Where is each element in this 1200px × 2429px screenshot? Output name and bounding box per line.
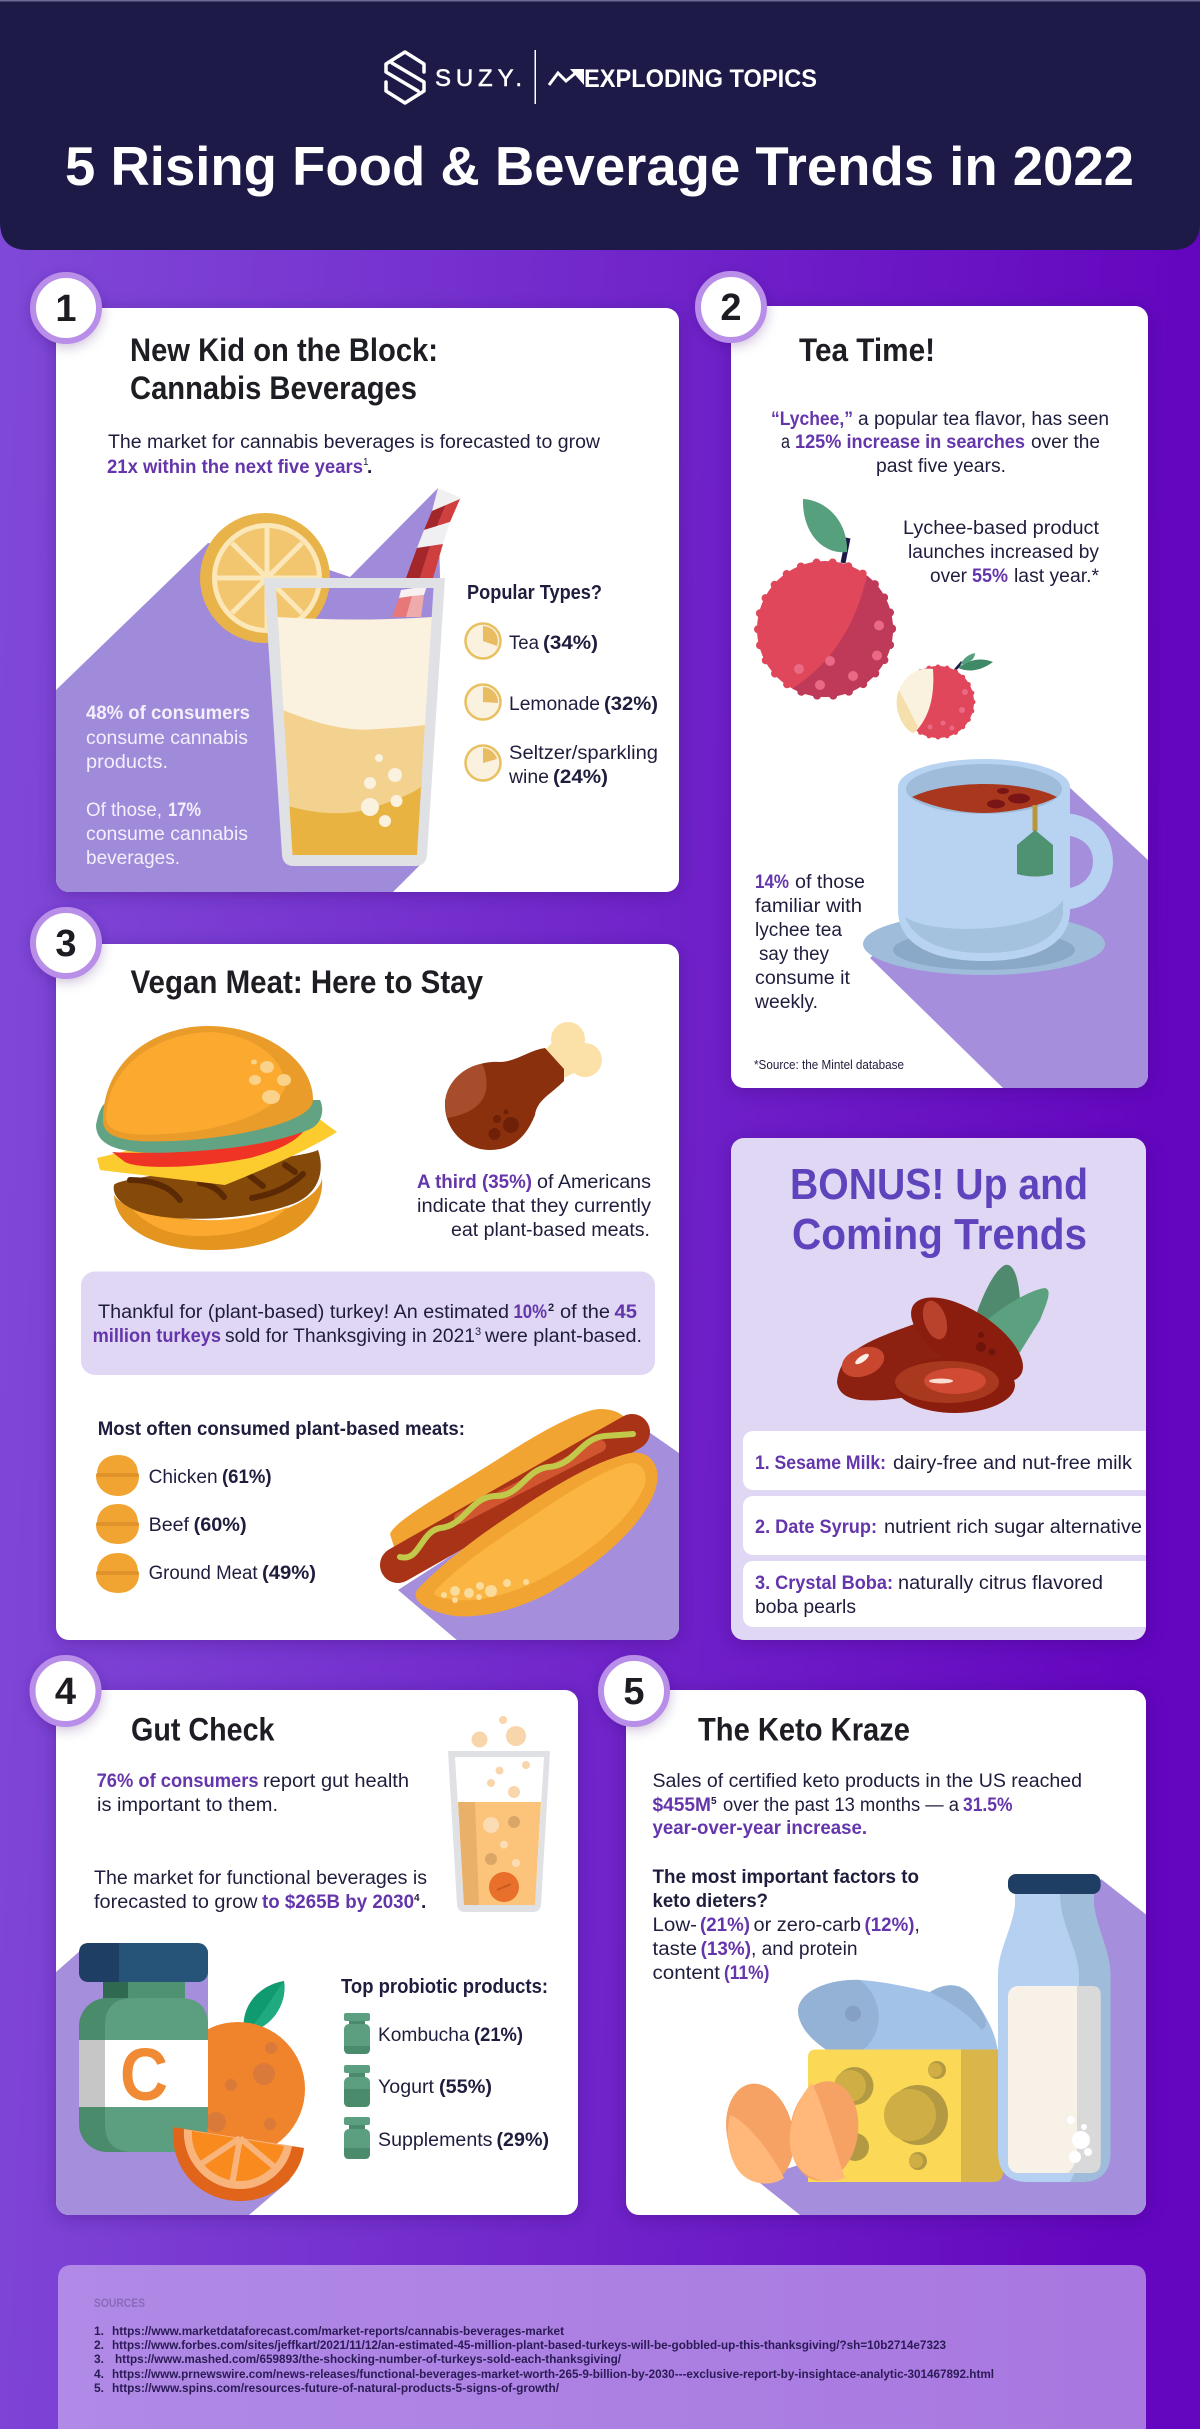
header band [0, 0, 1200, 250]
heading: Coming Trends [792, 1210, 1087, 1259]
popular types list: Lemonade [509, 694, 600, 715]
callout: turkey: 45 [614, 1302, 637, 1323]
row: crystal boba: naturally citrus flavored [898, 1573, 1103, 1594]
icon: mini burger [96, 1553, 139, 1593]
consumer stats: products. [86, 752, 168, 773]
icon: jar [344, 2117, 370, 2159]
sources list: https://www.forbes.com/sites/jeffkart/2021/11/12/an-estimated-45-million-plant-based-turkeys-will-be-gobbled-up-this-thanksgiving/?sh=10b2714e7323 [112, 2338, 946, 2352]
heading: Vegan Meat: Here to Stay [130, 964, 483, 1000]
plant-based meats list: Most often consumed plant-based meats: [98, 1419, 465, 1440]
heading: Cannabis Beverages [130, 370, 417, 406]
plant-based stat: eat plant-based meats. [451, 1220, 650, 1241]
icon: striped straw [392, 488, 461, 617]
product launch stat: over [930, 566, 968, 587]
functional beverage stat: . [421, 1892, 426, 1913]
keto factors: (12%) [864, 1915, 914, 1936]
functional beverage stat: 4 [414, 1893, 420, 1904]
logo: Suzy [386, 52, 522, 103]
icon: mini burger [96, 1455, 139, 1496]
product launch stat: 55% [972, 566, 1008, 587]
callout: turkey: 10% [514, 1302, 547, 1323]
shadow: hot dog [398, 1430, 679, 1640]
intro text: 21x within the next five years [107, 457, 363, 478]
row: sesame milk: dairy-free and nut-free milk [893, 1453, 1133, 1474]
icon: vitamin C bottle: C [120, 2033, 168, 2116]
probiotic products list: Kombucha [378, 2025, 470, 2046]
lychee search stat [771, 409, 1109, 477]
row: crystal boba: 3. Crystal Boba: [755, 1573, 893, 1594]
badge 1: 1 [55, 288, 77, 330]
keto factors: Low- [652, 1915, 697, 1936]
icon: dates [837, 1265, 1049, 1413]
plant-based stat: of Americans [537, 1172, 651, 1193]
product launch stat: launches increased by [908, 542, 1099, 563]
heading: BONUS! Up and [790, 1160, 1088, 1209]
row: date syrup: nutrient rich sugar alternative [884, 1517, 1142, 1538]
keto factors: or zero-carb [754, 1915, 861, 1936]
gut health stat [97, 1771, 409, 1816]
popular types list: Popular Types? [467, 582, 602, 604]
gut health stat: report gut health [263, 1771, 409, 1792]
popular types list [466, 582, 658, 788]
intro text [107, 432, 600, 478]
probiotic products list [341, 1976, 549, 2159]
logo: Suzy: SUZY. [435, 65, 522, 92]
shadow: drink [56, 488, 440, 892]
gut health stat: is important to them. [97, 1795, 278, 1816]
panel 4: gut check [56, 1690, 578, 2215]
row: sesame milk: 1. Sesame Milk: [755, 1453, 886, 1474]
popular types list: Tea [509, 633, 539, 654]
icon: mini burger [96, 1504, 139, 1544]
probiotic products list: Supplements [378, 2130, 492, 2151]
weekly consumption stat: 14% [755, 872, 789, 893]
popular types list: (34%) [543, 633, 598, 654]
icon: milk bottle [998, 1874, 1110, 2182]
sources list [94, 2324, 994, 2395]
icon: cheese [808, 2050, 1003, 2182]
row: date syrup [743, 1496, 1163, 1555]
sources list: 2. [94, 2338, 104, 2352]
weekly consumption stat: familiar with [755, 896, 862, 917]
keto factors: The most important factors to [652, 1867, 919, 1888]
shadow: tea cup [870, 785, 1148, 1088]
sources list: https://www.prnewswire.com/news-releases/functional-beverages-market-worth-265-9-billion-by-2030---exclusive-report-by-insightace-analytic-301467892.html [112, 2367, 994, 2381]
icon: jar [344, 2013, 370, 2054]
intro text: . [367, 457, 372, 478]
probiotic products list: (21%) [474, 2025, 523, 2046]
popular types list: (24%) [553, 767, 608, 788]
badge 4 [32, 1658, 98, 1724]
icon: orange [171, 1981, 305, 2156]
panel 3: vegan meat [56, 944, 679, 1640]
popular types list: Seltzer/sparkling [509, 743, 658, 764]
panel 1: cannabis beverages [56, 308, 679, 892]
sources list: https://www.mashed.com/659893/the-shocking-number-of-turkeys-sold-each-thanksgiving/ [115, 2352, 622, 2366]
icon: glass of drink [264, 578, 445, 866]
heading: The Keto Kraze [698, 1712, 910, 1748]
icon: jar [344, 2065, 370, 2107]
lychee search stat: 125% increase in searches [795, 432, 1025, 453]
lychee search stat: a popular tea flavor, has seen [858, 409, 1109, 430]
shadow: keto foods [755, 1879, 1146, 2215]
heading [130, 332, 438, 406]
sources heading: SOURCES [94, 2296, 145, 2310]
consumer stats: 17% [168, 800, 201, 821]
keto factors: (21%) [700, 1915, 750, 1936]
plant-based meats list: Beef [149, 1515, 190, 1536]
callout: turkey: were plant-based. [484, 1326, 642, 1347]
keto factors: (11%) [724, 1963, 769, 1984]
badge 3: 3 [55, 923, 77, 965]
panel: bonus trends [731, 1138, 1163, 1640]
product launch stat: Lychee-based product [903, 518, 1100, 539]
keto sales stat: over the past 13 months — a [723, 1795, 959, 1816]
icon: hot dog [390, 1409, 658, 1616]
probiotic products list: Top probiotic products: [341, 1976, 548, 1998]
weekly consumption stat: of those [795, 872, 865, 893]
callout: turkey: million turkeys [93, 1326, 221, 1347]
icon: burger [96, 1026, 337, 1250]
keto factors: content [652, 1963, 721, 1984]
icon: eggs [717, 2077, 865, 2189]
icon: peeled lychee [897, 653, 993, 738]
plant-based meats list: (49%) [262, 1563, 316, 1584]
icon: seltzer pie [466, 746, 500, 780]
functional beverage stat: The market for functional beverages is [94, 1868, 427, 1889]
functional beverage stat: to $265B by 2030 [262, 1892, 414, 1913]
keto sales stat: $455M [652, 1795, 711, 1816]
panel 2: tea time [731, 306, 1148, 1088]
keto sales stat: Sales of certified keto products in the US reached [652, 1771, 1082, 1792]
sources list: 1. [94, 2324, 104, 2338]
probiotic products list: Yogurt [378, 2077, 435, 2098]
logo: Exploding Topics: EXPLODING TOPICS [584, 65, 817, 93]
keto sales stat: year-over-year increase. [652, 1818, 867, 1839]
consumer stats: beverages. [86, 848, 180, 869]
plant-based meats list [96, 1419, 465, 1593]
plant-based stat: indicate that they currently [417, 1196, 652, 1217]
callout: turkey: sold for Thanksgiving in 2021 [225, 1326, 475, 1347]
badge 1 [33, 275, 99, 341]
plant-based meats list: (60%) [194, 1515, 247, 1536]
icon: tea pie [466, 624, 500, 658]
lychee search stat: over the [1031, 432, 1100, 453]
keto factors [652, 1867, 920, 1984]
heading: New Kid on the Block: [130, 332, 438, 368]
badge 2 [698, 274, 764, 340]
heading [790, 1160, 1088, 1259]
weekly consumption stat: say they [759, 944, 829, 965]
title: 5 Rising Food & Beverage Trends in 2022 [65, 135, 1134, 197]
heading: Gut Check [131, 1712, 275, 1748]
consumer stats: consume cannabis [86, 728, 248, 749]
product launch stat: last year.* [1014, 566, 1100, 587]
plant-based stat [417, 1172, 652, 1241]
keto sales stat [652, 1771, 1082, 1839]
keto factors: keto dieters? [652, 1891, 768, 1912]
panel 5: keto [626, 1690, 1146, 2215]
row: crystal boba [743, 1561, 1163, 1627]
callout: turkey: Thankful for (plant-based) turkey! An estimated [98, 1302, 509, 1323]
callout: turkey: 2 [548, 1302, 554, 1314]
lychee search stat: “Lychee,” [771, 409, 853, 430]
icon: fizzy drink [448, 1716, 550, 1912]
weekly consumption stat: consume it [755, 968, 851, 989]
product launch stat [903, 518, 1100, 587]
shadow: vitamins [56, 1950, 290, 2215]
consumer stats: consume cannabis [86, 824, 248, 845]
sources list: 5. [94, 2381, 104, 2395]
consumer stats [86, 703, 250, 869]
sources list: https://www.marketdataforecast.com/market-reports/cannabis-beverages-market [112, 2324, 564, 2338]
gut health stat: 76% of consumers [97, 1771, 259, 1792]
lychee search stat: past five years. [876, 456, 1006, 477]
intro text: 1 [363, 457, 369, 468]
functional beverage stat: forecasted to grow [94, 1892, 258, 1913]
plant-based meats list: (61%) [222, 1467, 272, 1488]
row: date syrup: 2. Date Syrup: [755, 1517, 877, 1538]
badge 4: 4 [55, 1671, 76, 1713]
keto factors: (13%) [701, 1939, 751, 1960]
weekly consumption stat: lychee tea [755, 920, 842, 941]
keto factors: , [914, 1915, 920, 1936]
weekly consumption stat [754, 872, 865, 1013]
badge 5: 5 [623, 1671, 645, 1713]
row: crystal boba: boba pearls [755, 1597, 856, 1618]
plant-based meats list: Chicken [149, 1467, 218, 1488]
popular types list: (32%) [604, 694, 658, 715]
callout: turkey: 3 [475, 1326, 481, 1338]
badge 5 [601, 1658, 667, 1724]
source note: *Source: the Mintel database [754, 1058, 904, 1072]
trend rows [743, 1431, 1163, 1627]
icon: fish [798, 1980, 998, 2052]
icon: vitamin C bottle [79, 1943, 208, 2152]
lychee search stat: a [781, 432, 790, 453]
keto sales stat: 5 [711, 1796, 717, 1807]
callout: turkey: of the [560, 1302, 610, 1323]
plant-based meats list: Ground Meat [149, 1563, 258, 1584]
intro text: The market for cannabis beverages is forecasted to grow [108, 432, 600, 453]
probiotic products list: (29%) [496, 2130, 549, 2151]
row: sesame milk [743, 1431, 1163, 1490]
weekly consumption stat: weekly. [754, 992, 818, 1013]
probiotic products list: (55%) [439, 2077, 492, 2098]
icon: orange slice [173, 2127, 304, 2201]
keto sales stat: 31.5% [963, 1795, 1013, 1816]
icon: tea cup [863, 759, 1113, 975]
icon: lemonade pie [466, 684, 500, 720]
icon: drumstick [445, 1022, 602, 1150]
icon: lemon slice [200, 513, 330, 643]
keto factors: , and protein [751, 1939, 858, 1960]
heading: Tea Time! [799, 332, 935, 368]
popular types list: wine [508, 767, 549, 788]
icon: lychee [757, 499, 893, 697]
keto factors: taste [652, 1939, 697, 1960]
sources list: 3. [94, 2352, 104, 2366]
consumer stats: Of those, [86, 800, 162, 821]
sources list: https://www.spins.com/resources-future-of-natural-products-5-signs-of-growth/ [112, 2381, 560, 2395]
badge 2: 2 [720, 287, 742, 329]
functional beverage stat [94, 1868, 427, 1913]
panel: sources [58, 2265, 1146, 2429]
badge 3 [33, 910, 99, 976]
consumer stats: 48% of consumers [86, 703, 250, 724]
callout: turkey [81, 1272, 655, 1375]
sources list: 4. [94, 2367, 104, 2381]
plant-based stat: A third (35%) [417, 1172, 532, 1193]
